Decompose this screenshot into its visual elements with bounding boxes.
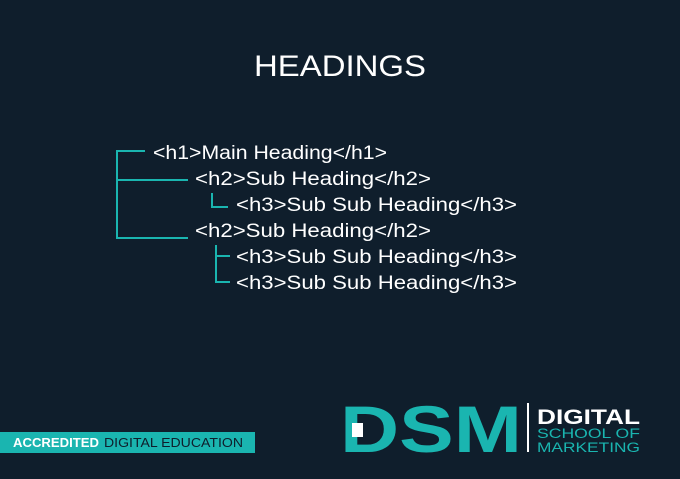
logo: DSM: SCHOOL OF	[537, 426, 640, 441]
logo: DSM: DIGITAL	[537, 406, 640, 429]
logo: DSM	[340, 392, 640, 466]
heading lines: <h3>Sub Sub Heading</h3>	[236, 195, 517, 216]
banner: accredited digital education	[0, 432, 255, 453]
heading lines: <h3>Sub Sub Heading</h3>	[236, 247, 517, 268]
heading lines: <h2>Sub Heading</h2>	[195, 169, 431, 190]
heading lines: <h3>Sub Sub Heading</h3>	[236, 273, 517, 294]
heading lines: <h1>Main Heading</h1>	[153, 143, 387, 164]
banner: accredited digital education: ACCREDITED	[13, 436, 99, 450]
banner: accredited digital education: DIGITAL EDUCATION	[104, 436, 243, 450]
logo: DSM: MARKETING	[537, 440, 640, 455]
heading lines	[153, 143, 517, 294]
title: HEADINGS	[254, 50, 426, 83]
tree diagram	[117, 143, 517, 294]
tree connectors	[117, 151, 230, 282]
heading lines: <h2>Sub Heading</h2>	[195, 221, 431, 242]
logo: DSM: DSM	[340, 392, 522, 466]
